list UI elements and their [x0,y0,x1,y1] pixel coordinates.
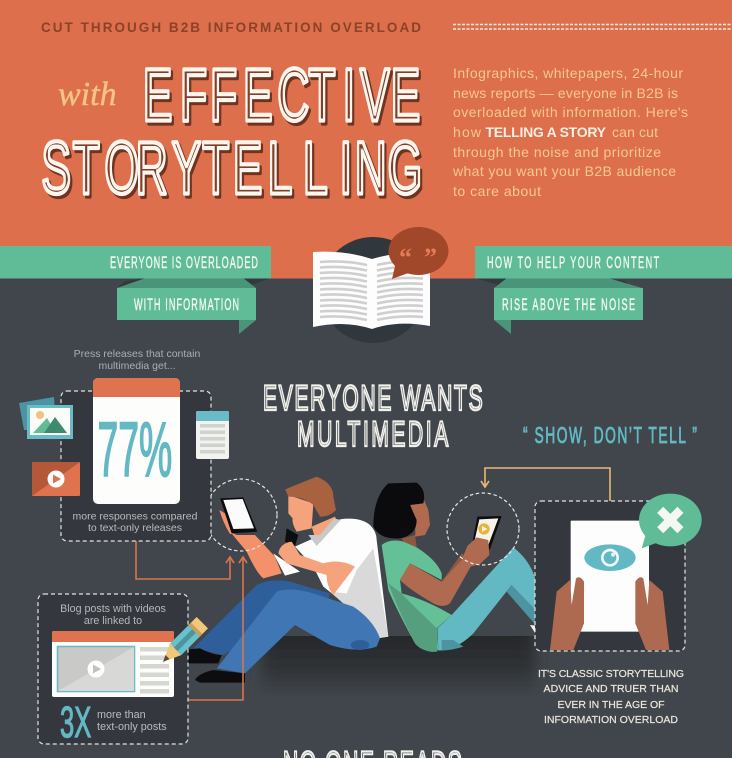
intro paragraph [452,65,688,199]
script word: with: with [58,76,117,113]
icon: eye [584,544,636,571]
title: EFFECTIVE STORYTELLING: EFFECTIVE [143,54,420,136]
intro paragraph: through the noise and prioritize [453,144,661,160]
illustration: woman with tablet [373,483,536,652]
intro paragraph: what you want your B2B audience [452,163,676,179]
icon: pencil [163,617,208,662]
heading: everyone wants multimedia [263,380,483,454]
quote: show, don't tell: “ SHOW, DON’T TELL ” [523,424,697,449]
heading: everyone wants multimedia: MULTIMEDIA [297,416,449,454]
panel: show don't tell illustration [535,494,702,651]
icon: open book with quote bubble [313,227,448,343]
paper sheet [571,521,649,632]
text: storytelling advice: ADVICE AND TRUER THAN [544,683,678,695]
ribbon: how to help your content rise above the noise: HOW TO HELP YOUR CONTENT [487,253,659,272]
kicker heading: CUT THROUGH B2B INFORMATION OVERLOAD [41,20,421,35]
intro paragraph: to care about [453,183,541,199]
intro paragraph: news reports — everyone in B2B is [453,85,678,101]
caption: more responses [73,510,198,534]
dashed double rule [453,24,732,29]
ribbon: how to help your content rise above the noise [475,246,732,334]
caption: blog posts [60,603,166,627]
icon: open book with quote bubble: “ [399,243,412,272]
card: 77 percent [93,378,180,504]
speech bubble with X [639,494,702,548]
ribbon: everyone is overloaded with information: EVERYONE IS OVERLOADED [110,253,258,272]
ribbon: everyone is overloaded with information: WITH INFORMATION [134,295,239,314]
caption: press releases: Press releases that contain [74,348,200,360]
text: storytelling advice: IT'S CLASSIC STORYTELLING [538,668,684,680]
caption: press releases [74,348,200,372]
intro paragraph: how [453,124,482,140]
caption: blog posts: Blog posts with videos [60,603,166,615]
panel: blog posts stat [38,594,188,747]
icon: open book with quote bubble: ” [424,243,437,272]
icon: document [196,411,229,459]
title: EFFECTIVE STORYTELLING: STORYTELLING [41,127,422,209]
text: storytelling advice [538,668,684,726]
title: EFFECTIVE STORYTELLING: EFFECTIVE [145,57,422,139]
dashed circle: man's tablet [205,479,277,551]
caption: blog posts: are linked to [84,615,142,627]
background: orange header section [0,0,732,278]
connector: orange arrows [136,541,247,700]
illustration: man with tablet [188,477,388,683]
text: storytelling advice: EVER IN THE AGE OF [558,699,664,711]
title: EFFECTIVE STORYTELLING: STORYTELLING [44,130,424,212]
caption: more than text-only posts: text-only posts [97,721,167,733]
ribbon: how to help your content rise above the noise: RISE ABOVE THE NOISE [502,295,635,314]
caption: more than text-only posts: more than [97,709,146,721]
intro paragraph: TELLING A STORY [486,124,607,140]
heading: everyone wants multimedia: MULTIMEDIA [297,416,449,454]
icon: video [32,462,80,496]
ribbon: everyone is overloaded with information [0,246,271,334]
caption: press releases: multimedia get... [98,360,176,372]
dashed circle: woman's tablet [447,493,519,565]
caption: more responses: to text-only releases [88,522,182,534]
title: EFFECTIVE STORYTELLING: EFFECTIVE [143,54,420,136]
panel: press releases stat [19,348,229,541]
floor shadow [262,636,535,698]
text: storytelling advice: INFORMATION OVERLOAD [544,714,678,726]
heading: everyone wants multimedia: EVERYONE WANTS [263,380,483,418]
card: 77 percent: 77% [98,406,172,493]
hands holding sheet [550,577,669,650]
intro paragraph: can cut [612,124,658,140]
caption: more responses: more responses compared [73,510,198,522]
stat: 3X: 3X [60,697,91,747]
title: EFFECTIVE STORYTELLING [41,54,424,212]
intro paragraph: overloaded with information. Here's [453,104,688,120]
title: EFFECTIVE STORYTELLING: STORYTELLING [41,127,422,209]
card: blog page with video [52,631,174,697]
icon: picture [19,397,73,439]
intro paragraph: Infographics, whitepapers, 24-hour [453,65,683,81]
heading: everyone wants multimedia: EVERYONE WANTS [263,380,483,418]
caption: more than text-only posts [97,709,167,733]
connector: yellow arrow [481,468,610,501]
